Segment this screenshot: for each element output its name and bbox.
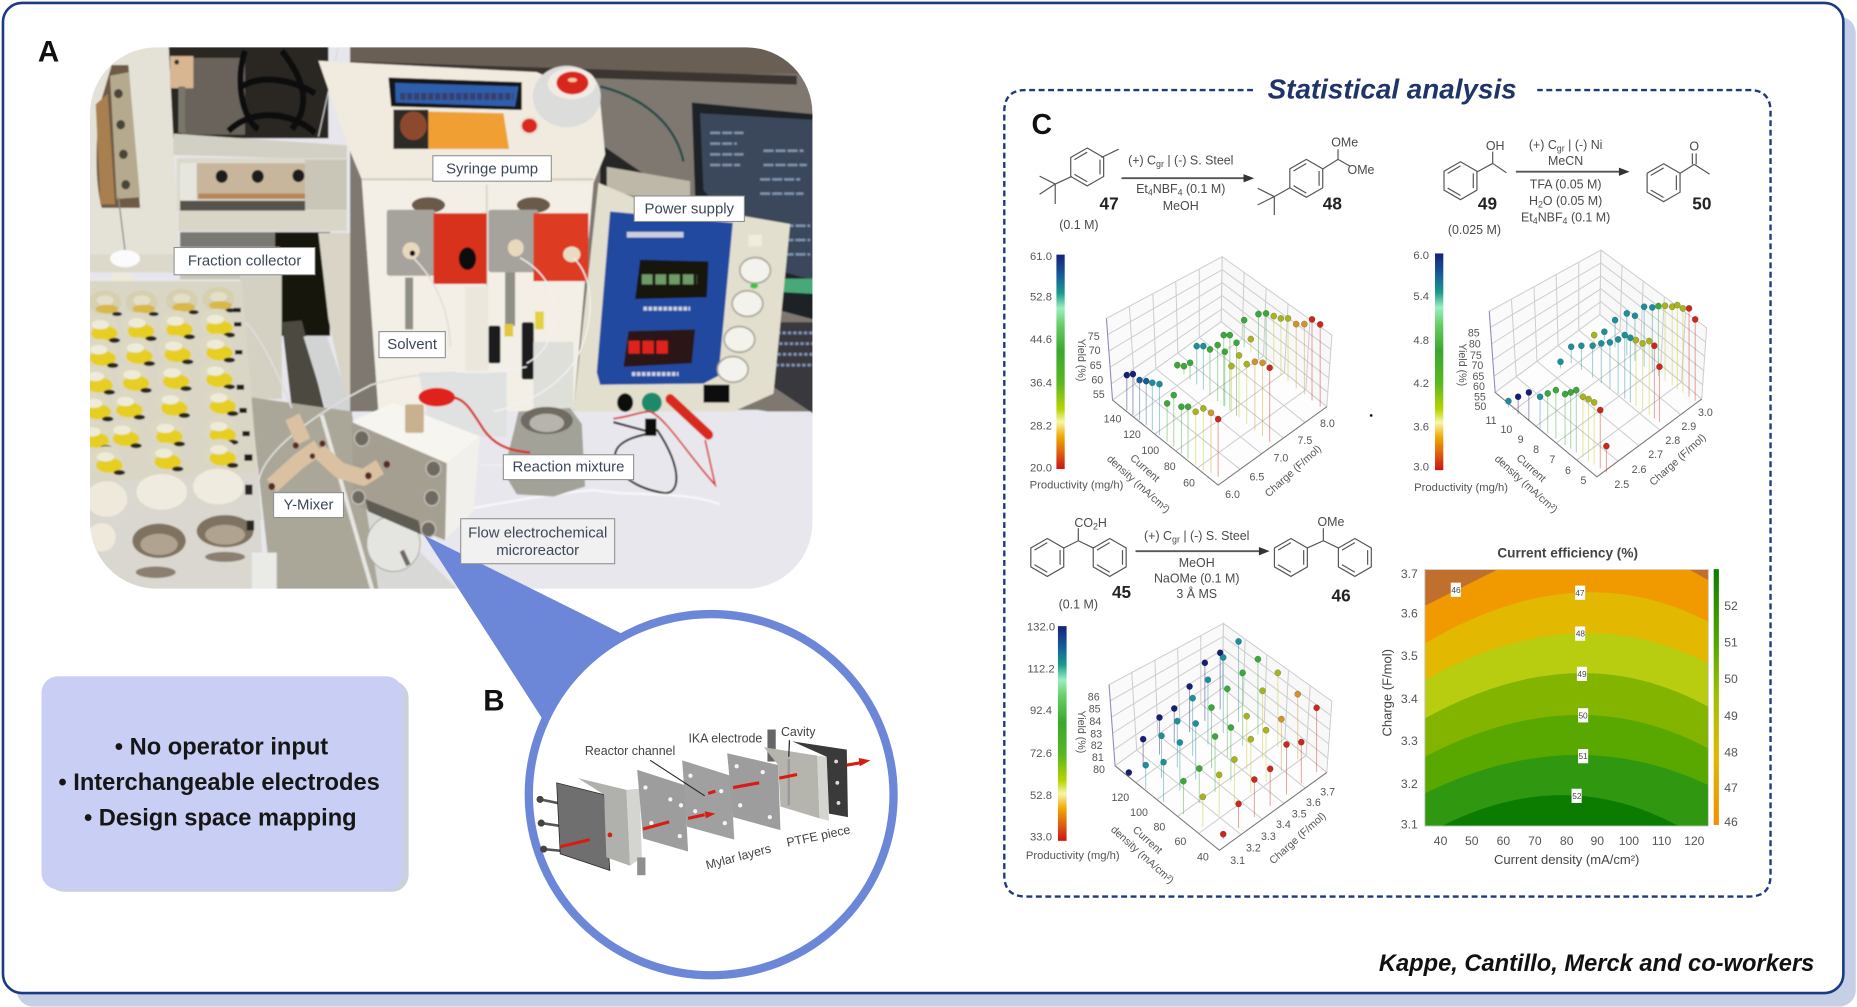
pump heads — [387, 210, 435, 276]
3D plot 3 axis labels: density (mA/cm²) — [1108, 824, 1176, 886]
reaction scheme: 49 to 50: 4 — [1563, 216, 1568, 226]
3D plot 2 axis labels: 2.7 — [1648, 449, 1663, 461]
contour y axis: 3.5 — [1401, 649, 1418, 663]
contour line labels: 48 — [1576, 629, 1585, 639]
3D plot 2 axis labels: density (mA/cm²) — [1492, 453, 1560, 516]
dark gap behind collector — [168, 45, 328, 138]
reaction scheme: 45 to 46: gr — [1172, 534, 1180, 544]
panel label C: C — [1032, 109, 1052, 141]
features callout box: • Interchangeable electrodes — [58, 770, 380, 796]
callout: Mylar layers: Mylar layers — [704, 841, 773, 872]
contour x axis: Current density (mA/cm²) — [1494, 852, 1639, 867]
3D plot 2 axis labels — [1456, 327, 1713, 516]
reaction scheme: 45 to 46: MeOH — [1179, 556, 1215, 570]
Y-mixer — [272, 417, 380, 486]
heading: statistical analysis: Statistical analysis — [1268, 73, 1517, 104]
contour line labels — [1451, 583, 1588, 803]
contour colour bar: 50 — [1724, 672, 1738, 686]
3D plot 1 axis labels: 120 — [1123, 429, 1141, 441]
label: syringe pump: Syringe pump — [446, 160, 538, 177]
chart 2: 3D scatter of yield, reaction 49 — [1413, 250, 1713, 516]
label: power supply: Power supply — [645, 201, 735, 218]
pump body — [318, 60, 606, 238]
3D plot 2 axis labels: 7 — [1549, 454, 1555, 466]
3D plot 2 axis labels: 75 — [1470, 350, 1482, 362]
reaction scheme: 47 to 48: Et — [1136, 182, 1148, 196]
3D plot 3 axis labels: 120 — [1111, 792, 1129, 804]
3D plot 2 axis labels: 3.0 — [1698, 407, 1713, 419]
3D plot 3 axis labels: 83 — [1090, 728, 1102, 740]
3D plot 2 points — [1489, 250, 1707, 477]
colour bar 3 — [1026, 622, 1120, 862]
reaction scheme: 47 to 48 — [1040, 136, 1375, 232]
callout: PTFE piece: PTFE piece — [785, 822, 852, 850]
colour bar 1: 36.4 — [1030, 378, 1052, 390]
colour bar 1 — [1030, 251, 1124, 492]
panel C: statistical analysis dashed frame — [1004, 90, 1771, 897]
reaction scheme: 49 to 50: | (-) Ni — [1565, 138, 1602, 152]
3D plot 2 axis labels: 11 — [1486, 415, 1497, 427]
3D plot 1 axis labels: 70 — [1089, 345, 1101, 357]
reaction scheme: 49 to 50: 50 — [1692, 194, 1711, 214]
3D plot 1 axis labels: Charge (F/mol) — [1263, 443, 1324, 500]
contour y axis — [1379, 567, 1418, 831]
3D plot 3 axis labels: 84 — [1089, 716, 1101, 728]
3D plot 1 axis labels: 55 — [1093, 389, 1105, 401]
display — [388, 78, 522, 110]
reaction scheme: 49 to 50: (+) C — [1529, 138, 1557, 152]
colour bar 2: 5.4 — [1413, 291, 1429, 303]
panel label A: A — [38, 36, 59, 69]
reaction scheme: 49 to 50: 2 — [1538, 199, 1543, 209]
leader: reactor channel — [650, 760, 705, 796]
contour y axis: 3.4 — [1401, 692, 1418, 706]
label: solvent: Solvent — [387, 336, 438, 353]
3D plot 1 axis labels: 7.5 — [1297, 435, 1312, 447]
label: solvent — [379, 332, 445, 358]
contour line labels: 50 — [1578, 710, 1588, 720]
contour colour bar: 48 — [1724, 745, 1738, 759]
reaction scheme: 47 to 48: OMe — [1348, 163, 1375, 177]
colour bar 1: 28.2 — [1030, 420, 1052, 432]
reaction scheme: 45 to 46 — [1031, 515, 1371, 611]
stray dot — [1370, 414, 1372, 417]
3D plot 2 axis labels: 8 — [1533, 444, 1539, 456]
colour bar 3: 33.0 — [1030, 831, 1052, 843]
reaction scheme: 49 to 50: O (0.05 M) — [1543, 194, 1602, 208]
right-hand background (offset into second crop space) — [349, 47, 812, 414]
photo labels — [174, 156, 744, 564]
3D plot 1 axis labels: 6.5 — [1250, 472, 1264, 484]
reaction scheme: 45 to 46: 45 — [1112, 582, 1132, 602]
3D plot 3 axis labels: 81 — [1092, 752, 1104, 764]
3D plot 1 axis labels: 60 — [1091, 375, 1103, 387]
contour colour bar: 52 — [1724, 599, 1738, 613]
contour colour bar — [1714, 569, 1738, 829]
colour bar 1: 52.8 — [1030, 291, 1052, 303]
reaction scheme: 47 to 48: NBF — [1153, 182, 1178, 196]
3D plot 2 axis labels: 5 — [1580, 475, 1586, 487]
panel label B: B — [483, 685, 505, 718]
reaction scheme: 49 to 50: O — [1689, 140, 1699, 154]
reaction scheme: 47 to 48: (0.1 M) — [1059, 218, 1099, 232]
contour line labels: 49 — [1577, 669, 1587, 679]
label: reaction mixture: Reaction mixture — [513, 459, 624, 476]
contour bands — [1425, 569, 1708, 826]
3D plot 2 axis labels: 50 — [1474, 401, 1486, 413]
reaction scheme: 49 to 50: NBF — [1538, 210, 1563, 224]
callout: cavity: Cavity — [781, 725, 816, 739]
colour bar 1: 20.0 — [1030, 462, 1052, 474]
colour bar 2: 6.0 — [1413, 250, 1429, 262]
reaction scheme: 49 to 50: OH — [1486, 139, 1505, 153]
3D plot 3 axis labels: 80 — [1093, 764, 1105, 776]
collector arm — [85, 40, 180, 272]
3D plot 1 axis labels: 60 — [1183, 477, 1195, 489]
power supply — [450, 183, 790, 508]
contour y axis: 3.6 — [1401, 606, 1418, 620]
panel A: photo of the flow setup — [77, 40, 823, 597]
reaction scheme: 47 to 48: (+) C — [1128, 154, 1156, 168]
3D plot 2 axis labels: 9 — [1518, 434, 1524, 446]
3D plot 3 axis labels: 80 — [1154, 822, 1165, 834]
contour x axis: 110 — [1652, 834, 1672, 848]
3D plot 2 axis labels: 55 — [1474, 391, 1486, 403]
3D plot 3 axis labels: 60 — [1174, 836, 1186, 848]
3D plot 2 axis labels: 10 — [1501, 424, 1512, 436]
colour bar 2 — [1413, 250, 1508, 494]
label: reaction mixture — [503, 455, 634, 480]
exploded view of reactor parts — [537, 730, 870, 875]
3D plot 3 axis labels: 3.7 — [1320, 786, 1335, 798]
contour y axis: 3.7 — [1401, 567, 1418, 581]
3D plot 3 axis labels: 3.1 — [1230, 855, 1245, 867]
vial rack — [85, 281, 262, 520]
reaction scheme: 45 to 46: 3 Å MS — [1176, 586, 1217, 601]
3D plot 2 axis labels: 80 — [1469, 338, 1481, 350]
features callout box — [41, 676, 409, 892]
3D plot 3 axis labels: Yield (%) — [1075, 710, 1087, 753]
reaction scheme: 47 to 48: (0.1 M) — [1183, 182, 1225, 196]
3D plot 2 axis labels: 2.8 — [1665, 435, 1680, 447]
contour colour bar: 46 — [1724, 815, 1738, 829]
3D plot 2 axis labels: 60 — [1473, 381, 1485, 393]
reaction scheme: 45 to 46: (+) C — [1144, 529, 1172, 543]
callout: IKA electrode: IKA electrode — [688, 731, 762, 745]
leader: cavity — [788, 740, 790, 757]
reaction scheme: 45 to 46: 2 — [1093, 521, 1098, 531]
3D plot 2 axis labels: 85 — [1468, 327, 1480, 339]
3D plot 1 axis labels: Current — [1127, 452, 1162, 485]
reaction scheme: 45 to 46: OMe — [1317, 515, 1344, 529]
label: flow electrochemical microreactor: microreactor — [496, 542, 579, 559]
reaction scheme: 49 to 50: gr — [1557, 144, 1565, 154]
colour bar 2: 4.2 — [1413, 378, 1429, 390]
contour x axis: 100 — [1619, 834, 1639, 848]
3D plot 1 axis labels: 6.0 — [1225, 489, 1240, 501]
colour bar 1: 44.6 — [1030, 334, 1052, 346]
contour x axis: 80 — [1560, 834, 1574, 848]
reaction scheme: 47 to 48: 47 — [1100, 194, 1119, 214]
contour x axis: 60 — [1497, 834, 1510, 848]
3D plot 1 axis labels: 7.0 — [1274, 452, 1288, 464]
colour bar 3: 132.0 — [1027, 622, 1055, 634]
reaction scheme: 47 to 48: 48 — [1323, 194, 1342, 214]
colour bar 3: 52.8 — [1030, 790, 1052, 802]
colour bar 2: 4.8 — [1413, 335, 1429, 347]
3D plot 1 axis labels — [1075, 331, 1335, 516]
label: syringe pump — [433, 156, 551, 181]
contour title: Current efficiency (%) — [1497, 545, 1638, 560]
3D plot 2 axis labels: Current — [1514, 452, 1548, 485]
reactor block — [367, 516, 420, 572]
3D plot 3 axis labels: 82 — [1091, 740, 1103, 752]
contour x axis: 90 — [1590, 834, 1604, 848]
label: flow electrochemical microreactor: Flow electrochemical — [468, 524, 607, 541]
chart 4: current efficiency contour plot — [1379, 545, 1738, 867]
3D plot 3 axis labels: 3.6 — [1306, 797, 1321, 809]
chart 3: 3D scatter of yield, reaction 45 — [1026, 622, 1335, 886]
3D plot 3 axis labels — [1075, 692, 1335, 886]
3D plot 3 axis labels: 40 — [1197, 851, 1209, 863]
3D plot 1 axis labels: Yield (%) — [1075, 339, 1087, 381]
3D plot 2 axis labels: Yield (%) — [1456, 343, 1468, 386]
3D plot 1 axis labels: 100 — [1141, 445, 1159, 457]
3D plot 1 axis labels: 75 — [1088, 331, 1100, 343]
colour bar 2: 3.0 — [1413, 462, 1429, 474]
chart 1: 3D scatter of yield, reaction 47 — [1030, 251, 1335, 516]
reaction scheme: 49 to 50: 49 — [1478, 194, 1497, 214]
label: Y-mixer — [274, 493, 343, 518]
colour bar 2: 3.6 — [1413, 422, 1429, 434]
reaction scheme: 47 to 48: | (-) S. Steel — [1164, 154, 1233, 168]
concrete stand — [503, 408, 585, 497]
label: fraction collector: Fraction collector — [188, 253, 301, 270]
reaction scheme: 47 to 48: gr — [1156, 159, 1164, 169]
3D plot 3 axis labels: 100 — [1130, 807, 1148, 819]
contour x axis: 70 — [1528, 834, 1542, 848]
colour bar 3: 92.4 — [1030, 705, 1052, 717]
3D plot 3 axis labels: 3.5 — [1292, 809, 1307, 821]
contour line labels: 51 — [1578, 751, 1588, 761]
3D plot 1 axis labels: 140 — [1104, 413, 1121, 425]
glass jar and beaker — [533, 342, 573, 411]
contour x axis: 50 — [1465, 834, 1479, 848]
reaction scheme: 49 to 50: TFA (0.05 M) — [1530, 178, 1602, 192]
3D plot 3 axis labels: 3.2 — [1246, 843, 1261, 855]
label: Y-mixer: Y-Mixer — [284, 497, 334, 514]
colour bar 1: 61.0 — [1030, 251, 1052, 263]
collector rail — [173, 134, 347, 160]
reaction scheme: 47 to 48: MeOH — [1163, 199, 1199, 213]
reaction scheme: 45 to 46: (0.1 M) — [1059, 597, 1098, 611]
reaction scheme: 49 to 50: 4 — [1533, 216, 1538, 226]
3D plot 2 axis labels: 2.6 — [1632, 464, 1647, 476]
reaction scheme: 49 to 50: (0.1 M) — [1567, 210, 1610, 224]
colour bar 2: Productivity (mg/h) — [1414, 482, 1508, 494]
reaction scheme: 49 to 50 — [1444, 138, 1711, 237]
e-stop knob — [533, 66, 601, 127]
colour bar 1: Productivity (mg/h) — [1030, 480, 1124, 492]
callout: reactor channel: Reactor channel — [585, 744, 675, 758]
3D plot 3 axis labels: Charge (F/mol) — [1267, 810, 1328, 867]
contour line labels: 52 — [1572, 791, 1582, 801]
reaction scheme: 47 to 48: 4 — [1178, 187, 1183, 197]
reaction scheme: 45 to 46: NaOMe (0.1 M) — [1154, 572, 1240, 586]
contour y axis: 3.1 — [1401, 817, 1418, 831]
label: power supply — [634, 196, 744, 221]
label: fraction collector — [174, 248, 315, 275]
contour y axis: 3.3 — [1401, 734, 1418, 748]
colour bar 3: Productivity (mg/h) — [1026, 850, 1120, 862]
3D plot 1 axis labels: 80 — [1164, 461, 1176, 473]
contour line labels: 47 — [1575, 588, 1585, 598]
contour colour bar: 49 — [1724, 709, 1738, 723]
reaction scheme: 45 to 46: H — [1098, 516, 1107, 530]
3D plot 3 axis labels: 85 — [1089, 703, 1101, 715]
contour x axis: 40 — [1434, 834, 1448, 848]
colour bar 3: 112.2 — [1027, 663, 1055, 675]
restore lower-left items over table band — [366, 510, 457, 588]
colour bar 3: 72.6 — [1030, 748, 1052, 760]
reaction scheme: 49 to 50: H — [1529, 194, 1538, 208]
reaction scheme: 45 to 46: | (-) S. Steel — [1180, 529, 1249, 543]
contour x axis — [1434, 834, 1705, 867]
3D plot 2 axis labels: 65 — [1472, 371, 1484, 383]
steel tray — [250, 397, 350, 589]
reaction scheme: 45 to 46: 46 — [1332, 586, 1351, 606]
features callout box: • No operator input — [115, 734, 328, 760]
3D plot 2 axis labels: 2.9 — [1681, 421, 1696, 433]
label: flow electrochemical microreactor — [461, 519, 615, 564]
3D plot 1 axis labels: 65 — [1090, 360, 1102, 372]
3D plot 1 axis labels: density (mA/cm²) — [1104, 453, 1172, 516]
3D plot 3 axis labels: 3.3 — [1261, 831, 1276, 843]
3D plot 1 axis labels: 8.0 — [1320, 418, 1335, 430]
reaction scheme: 47 to 48: 4 — [1148, 187, 1153, 197]
panel B: zoom circle with exploded reactor — [529, 614, 894, 975]
3D plot 2 axis labels: Charge (F/mol) — [1647, 432, 1709, 488]
contour colour bar: 47 — [1724, 781, 1738, 795]
3D plot 3 axis labels: Current — [1130, 824, 1164, 857]
3D plot 3 axis labels: 86 — [1088, 692, 1100, 704]
3D plot 3 points — [1109, 623, 1332, 850]
contour colour bar: 51 — [1724, 635, 1738, 649]
reaction scheme: 49 to 50: Et — [1521, 210, 1533, 224]
reaction scheme: 49 to 50: MeCN — [1548, 154, 1583, 168]
reaction scheme: 49 to 50: (0.025 M) — [1448, 223, 1501, 237]
credit line: Kappe, Cantillo, Merck and co-workers — [1379, 951, 1814, 977]
contour line labels: 46 — [1451, 585, 1461, 595]
contour y axis: Charge (F/mol) — [1379, 649, 1394, 737]
reaction scheme: 47 to 48: OMe — [1331, 136, 1358, 150]
3D plot 2 axis labels: 2.5 — [1614, 479, 1629, 491]
callout wedge from reactor to zoomed circle — [424, 535, 622, 719]
3D plot 2 axis labels: 6 — [1565, 465, 1571, 477]
contour x axis: 120 — [1684, 834, 1705, 848]
contour y axis: 3.2 — [1401, 777, 1418, 791]
reaction scheme: 45 to 46: CO — [1074, 516, 1093, 530]
flow arrows — [560, 758, 870, 847]
features callout box: • Design space mapping — [84, 805, 357, 831]
table — [352, 408, 767, 414]
3D plot 3 axis labels: 3.4 — [1276, 819, 1291, 831]
3D plot 2 axis labels: 70 — [1471, 360, 1483, 372]
3D plot 1 points — [1106, 257, 1332, 485]
